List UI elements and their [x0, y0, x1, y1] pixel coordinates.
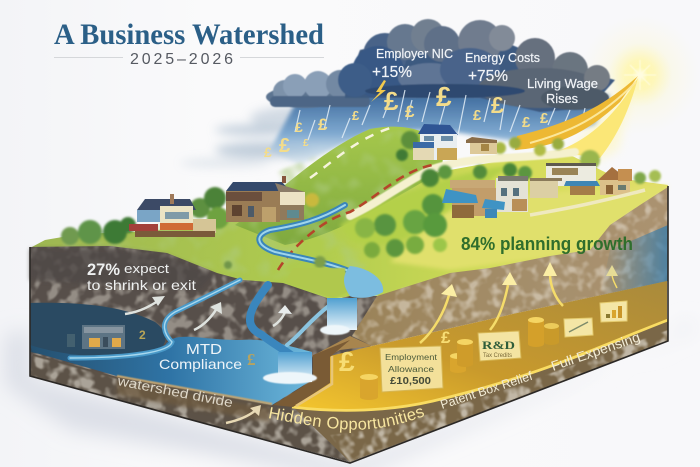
tan highlight line	[117, 376, 272, 404]
title rule right	[240, 57, 324, 58]
subtitle years: 2025–2026	[130, 51, 233, 68]
falling pound symbols: £	[491, 92, 504, 118]
buildings	[129, 124, 632, 237]
lower rock right	[292, 320, 668, 462]
label: +15%: +15%	[372, 64, 412, 81]
upper waterfall	[327, 298, 357, 330]
cross-section block	[30, 186, 668, 463]
ground shadow	[5, 320, 690, 467]
coin stack right tall	[528, 317, 544, 347]
dashed white road on back hill	[310, 128, 390, 178]
right rock texture	[352, 187, 668, 346]
block edges	[30, 186, 668, 463]
stream to cave	[70, 280, 240, 358]
building: small house behind	[466, 137, 497, 154]
left strata base rock	[30, 246, 377, 462]
title block	[54, 18, 324, 68]
cloud labels	[372, 47, 598, 106]
arrow two	[194, 302, 222, 330]
lower rock right texture	[330, 330, 668, 462]
sign: R and D tax credits	[478, 331, 521, 361]
building: brown inn	[226, 176, 305, 222]
label: MTD Compliance: MTD	[186, 342, 222, 358]
building: cafe with blue awning	[442, 176, 528, 218]
falling pound symbols: £	[279, 135, 290, 157]
falling pound symbols: £	[303, 138, 309, 149]
sign: employment allowance: Employment	[385, 353, 438, 362]
dashed red road	[278, 165, 432, 270]
label: 84 percent planning growth: 84% planning growth	[461, 233, 633, 254]
sign: rising chart	[564, 318, 593, 337]
gold coin stacks	[360, 317, 559, 400]
arrow: patent box	[543, 262, 563, 306]
falling pound symbols: £	[264, 144, 272, 160]
faint number glyph: 2	[139, 328, 146, 342]
gold opportunity layer	[292, 281, 667, 409]
watershed divide wall	[273, 336, 372, 407]
town footpath	[530, 190, 645, 215]
left hill texture	[30, 130, 430, 290]
arrow four	[226, 405, 261, 423]
right rock stratum	[352, 187, 668, 346]
coin stack mid tall	[457, 339, 473, 367]
coin stack mid low	[450, 353, 466, 373]
lower waterfall	[278, 352, 312, 382]
white arrows	[125, 296, 292, 423]
arrow: full expensing	[606, 265, 618, 288]
rain streaks	[295, 90, 585, 140]
arrow: R and D	[490, 272, 517, 330]
label: 27 percent expect to shrink or exit: expect	[124, 261, 169, 276]
green bank near river	[285, 268, 348, 298]
label: MTD Compliance: Compliance	[159, 356, 242, 372]
small left cloud	[266, 70, 370, 108]
label: employer NIC: Employer NIC	[376, 47, 453, 61]
building: left shop	[129, 194, 216, 237]
label: full expensing: Full Expensing	[549, 329, 642, 374]
falling pound symbols: £	[405, 102, 415, 121]
falling pound symbols: £	[318, 115, 328, 134]
gold pound signs	[339, 328, 451, 377]
label: 27 percent expect to shrink or exit	[87, 260, 196, 293]
title rule left	[54, 57, 123, 58]
blue tint at right of rock	[600, 225, 668, 296]
yellow arrows	[420, 262, 618, 343]
falling pound symbols: £	[436, 81, 452, 112]
sign: employment allowance: Allowance	[388, 365, 435, 374]
label: 27 percent expect to shrink or exit: 27%	[87, 260, 120, 279]
tan divide band	[30, 354, 350, 462]
rain curtain	[270, 95, 610, 165]
side channel	[287, 305, 330, 345]
label: rises: Rises	[546, 92, 578, 106]
right bright field	[390, 186, 668, 270]
divide band rocks	[30, 356, 350, 462]
cream hillside path	[350, 152, 575, 216]
river on surface	[259, 205, 370, 282]
label: hidden opportunities: Hidden Opportunities	[269, 407, 424, 433]
sign: bar chart	[600, 301, 627, 322]
falling pound symbols: £	[384, 86, 399, 116]
arrow three	[273, 305, 292, 326]
main storm cloud	[338, 19, 615, 112]
sign: employment allowance	[380, 346, 443, 392]
trees	[61, 131, 661, 269]
arrow one	[125, 296, 165, 314]
brown upper band	[117, 380, 270, 422]
building: brown gable	[598, 167, 632, 195]
label: energy costs: Energy Costs	[465, 51, 540, 65]
label: living wage: Living Wage	[527, 77, 598, 91]
sign: employment allowance: £10,500	[390, 376, 431, 387]
building: blue hill house	[413, 124, 458, 160]
label: 27 percent expect to shrink or exit: to shrink or exit	[87, 277, 196, 293]
cave building	[67, 325, 146, 349]
sun glow	[570, 15, 700, 165]
label: MTD Compliance	[159, 342, 242, 372]
cave cavity	[30, 303, 165, 360]
falling pound symbols: £	[540, 110, 549, 127]
stream highlight	[70, 280, 240, 358]
underground blue layer	[30, 337, 312, 405]
pound in water: £	[247, 350, 256, 369]
mid green slope	[340, 165, 510, 245]
upper soil dark tone	[30, 248, 215, 290]
gold pound signs: £	[339, 346, 355, 377]
falling pound symbols: £	[295, 119, 303, 135]
arrow: employment allowance	[420, 284, 457, 343]
label: +75%: +75%	[468, 68, 508, 85]
waterfall foam	[320, 325, 350, 335]
falling pound symbols: £	[352, 108, 360, 123]
rock river and streams	[70, 280, 330, 358]
storm clouds	[266, 19, 615, 112]
label: patent box relief: Patent Box Relief	[439, 369, 535, 412]
lowland	[30, 150, 668, 300]
coin stack right low	[544, 323, 559, 345]
central channel	[250, 285, 295, 358]
fog behind hill	[180, 106, 350, 167]
sign: R and D tax credits: Tax Credits	[483, 353, 512, 359]
upper pool	[344, 266, 383, 298]
coin stack left	[360, 374, 378, 400]
falling pound symbols: £	[522, 114, 531, 131]
lightning bolt	[371, 80, 386, 102]
lower foam	[263, 372, 317, 384]
left strata light rocks	[30, 246, 377, 462]
landscape surface	[30, 127, 668, 300]
sign: R and D tax credits: R&D	[482, 338, 515, 352]
building: white row	[530, 163, 600, 198]
title: A Business Watershed	[54, 18, 324, 51]
label: watershed divide: watershed divide	[115, 373, 234, 410]
falling pound symbols: £	[473, 107, 482, 124]
gold pound signs: £	[441, 328, 451, 347]
falling pound symbols	[264, 81, 549, 160]
gold seam line	[292, 320, 668, 410]
back hill	[235, 127, 443, 245]
yellow light beam	[515, 76, 638, 158]
